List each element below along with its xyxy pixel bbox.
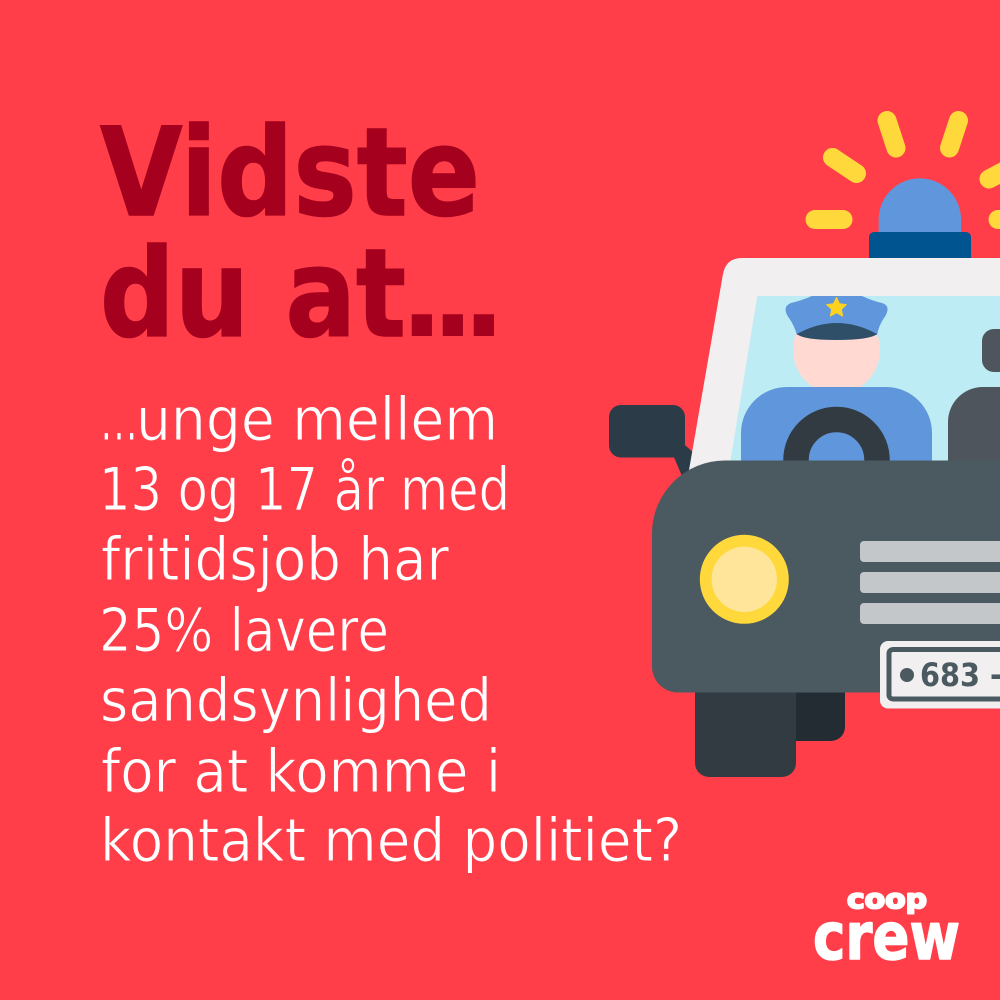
- car hood: [652, 460, 1000, 692]
- headlight: [700, 535, 789, 624]
- license plate: [880, 641, 1000, 708]
- front wheel: [695, 680, 796, 777]
- body text: for at komme i: [101, 737, 501, 807]
- driver: police officer: [741, 296, 932, 465]
- body text: kontakt med politiet?: [100, 806, 682, 876]
- body text: sandsynlighed: [100, 666, 492, 736]
- title: Vidste du at: du at: [100, 223, 406, 365]
- title: Vidste du at: Vidste: [100, 102, 480, 244]
- grille: [860, 541, 1000, 624]
- steering wheel: [796, 420, 877, 500]
- logo: coop crew: crew: [813, 900, 960, 975]
- body text: fritidsjob har: [101, 525, 449, 595]
- officer body: [741, 387, 932, 465]
- title: Vidste du at: [100, 102, 494, 365]
- body text: 13 og 17 år med: [99, 455, 510, 525]
- cap brim: [797, 323, 877, 340]
- cap star: [827, 298, 846, 316]
- icon: siren: [869, 178, 971, 259]
- side mirror: [609, 405, 685, 458]
- side mirror arm: [673, 445, 697, 482]
- windshield frame: [689, 258, 1000, 470]
- passenger seat: [948, 329, 1000, 465]
- rear wheel: [780, 680, 845, 741]
- officer cap: [786, 296, 888, 335]
- windshield glass: [729, 296, 1000, 470]
- logo: coop crew: coop: [847, 884, 927, 915]
- officer head: [793, 306, 880, 394]
- title: Vidste du at: ...: [400, 230, 494, 364]
- body text: unge mellem: [136, 385, 498, 455]
- body text: 25% lavere: [99, 596, 389, 666]
- body text: …: [100, 385, 138, 455]
- illustration: police car: [609, 120, 1000, 777]
- body text: [99, 385, 682, 876]
- icon: flashing light rays: [815, 120, 1000, 220]
